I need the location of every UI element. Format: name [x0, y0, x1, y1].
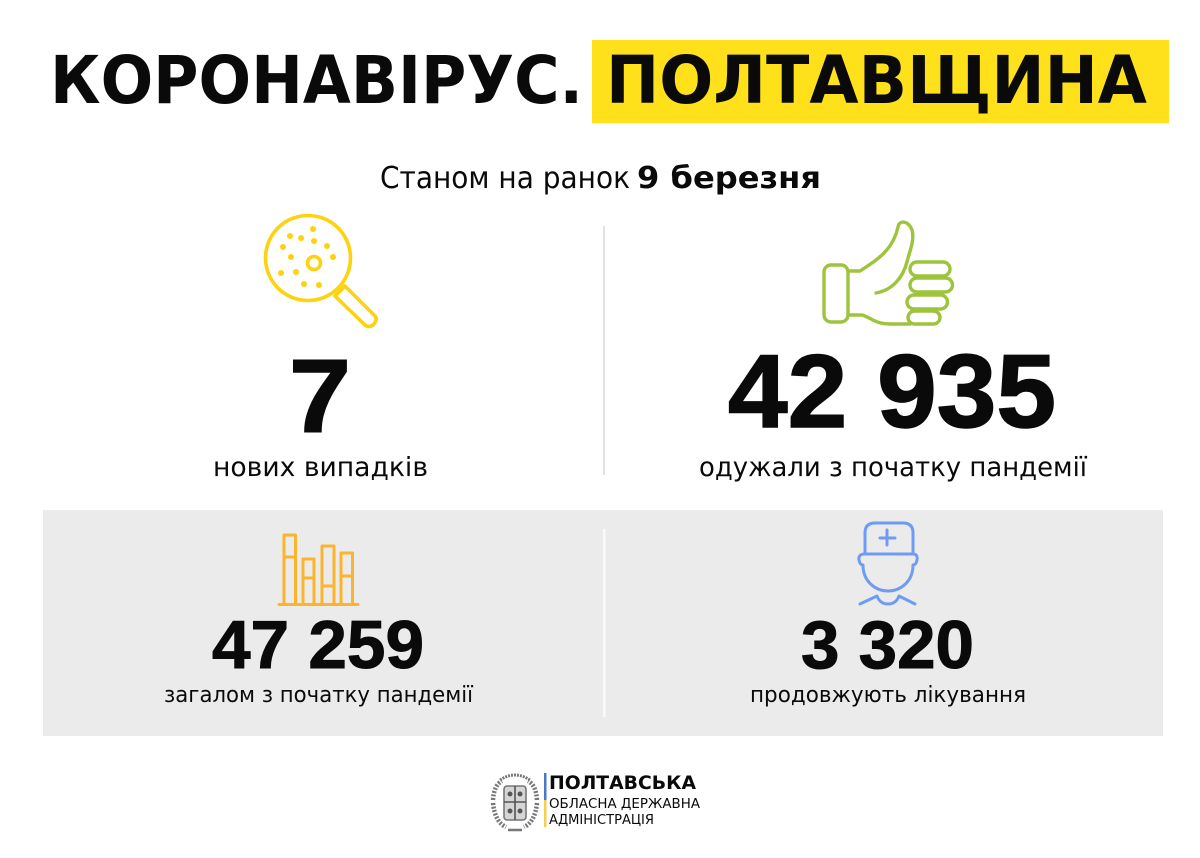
icon: doctor	[859, 523, 917, 604]
subtitle: date	[380, 161, 821, 196]
title: КОРОНАВІРУС.	[50, 42, 583, 119]
stat: recovered: одужали з початку пандемії	[699, 452, 1087, 483]
stat: under treatment: 3 320	[801, 607, 974, 683]
stat: recovered	[699, 334, 1087, 483]
icon: bar chart	[279, 535, 358, 604]
logo: Poltava regional administration: ПОЛТАВСЬКА	[549, 772, 696, 794]
stat: new cases: нових випадків	[213, 452, 428, 483]
logo: Poltava regional administration	[493, 772, 700, 830]
stat: under treatment: продовжують лікування	[750, 683, 1026, 708]
logo: Poltava regional administration: ОБЛАСНА ДЕРЖАВНА	[549, 797, 700, 812]
stat: new cases: 7	[289, 339, 351, 455]
subtitle: date: Станом на ранок	[380, 161, 630, 196]
stat: total cases: загалом з початку пандемії	[164, 683, 474, 708]
icon: thumbs up	[824, 222, 952, 324]
icon: magnifier with virus	[266, 216, 376, 326]
title	[50, 40, 1169, 123]
panel: totals	[43, 510, 1163, 736]
stat: new cases	[213, 339, 428, 483]
logo: Poltava regional administration: АДМІНІСТРАЦІЯ	[549, 813, 654, 828]
subtitle: date: 9 березня	[637, 161, 821, 196]
stat: under treatment	[750, 607, 1026, 708]
stat: recovered: 42 935	[728, 334, 1056, 450]
icon: coat of arms	[493, 775, 537, 830]
stat: total cases	[164, 607, 474, 708]
title: ПОЛТАВЩИНА	[606, 42, 1147, 119]
stat: total cases: 47 259	[212, 607, 424, 683]
